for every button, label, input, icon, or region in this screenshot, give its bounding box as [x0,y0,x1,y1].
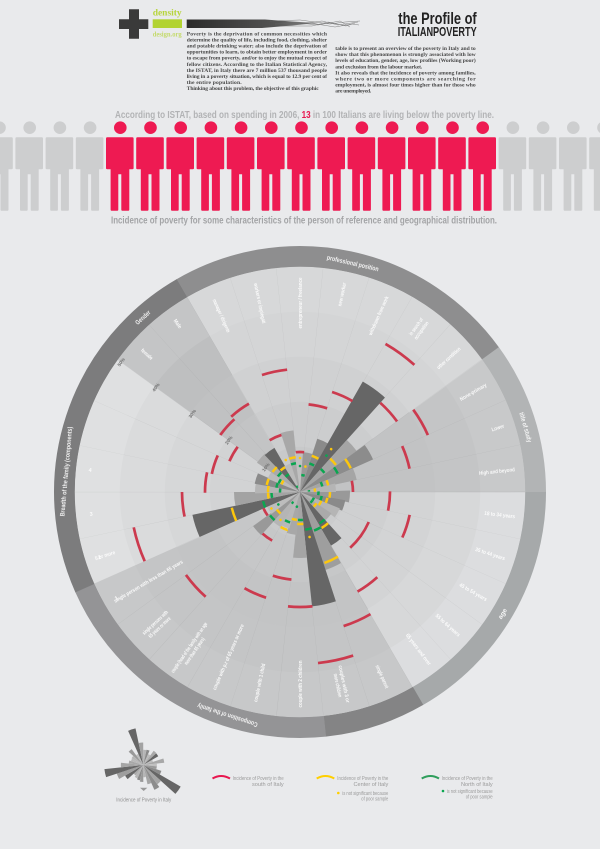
rim labels: Composition of the family [196,702,259,728]
wedge labels: gender: female [139,348,154,362]
rim labels: Breadth of the family (components) [59,426,74,517]
wedge labels: breadth of the family: 3 [89,512,93,518]
scale labels: 50% [116,357,126,367]
text block: intro column 1: determine the quality of life, including food, clothing, shelter [187,38,328,44]
wedge labels: composition of the family: single parent [374,664,389,690]
wedge labels: composition of the family: single person with less than 65 years [113,559,184,605]
wedge labels: gender [139,318,182,362]
title: ITALIANPOVERTY [398,24,477,39]
text block: intro column 1: and potable drinking water; also include the deprivation of [187,44,327,50]
logo: density design [119,8,182,39]
section: composition of the family rings [23,215,577,769]
wedge labels: age [404,511,515,667]
wedge labels: title of study: Lower [491,423,506,433]
text block: intro column 1: to escape from poverty, and/or to enjoy the mutual respect of [187,56,327,62]
wedge labels: professional position [211,278,462,371]
wedge labels: age: 65 years and over [404,633,432,667]
text block: intro column 2: table is to present an overview of the poverty in Italy and to [335,46,476,52]
rim labels: professional position [326,255,379,273]
wedge labels: age: 18 to 34 years [484,511,515,520]
legend: north of Italy [422,776,493,800]
wedge labels: age: 55 to 64 years [434,613,461,638]
wedge labels: professional position: new worker [337,282,348,307]
text block: intro column 2: employment, is almost four times higher than for those who [335,83,476,89]
text block: intro column 2 [335,46,477,95]
wedge labels: composition of the family: couple with 1 child [253,663,267,703]
wedge labels: breadth of the family: 4 [88,468,92,474]
wedge labels: composition of the family: couple with 2 children [298,660,304,708]
legend: south of Italy [212,776,284,788]
wedge dividers [188,380,412,604]
radial chart [0,163,600,821]
green dots: not significant [277,454,328,508]
section: gender rings [17,209,583,775]
wedge labels: composition of the family: single persons with [142,610,170,637]
wedge labels: breadth of the family: 1 [114,595,120,602]
section: age rings [98,290,502,694]
text block: intro column 1: fellow citizens. According to the Italian Statistical Agency, [187,62,328,68]
wedge labels: professional position: withdrawn from work [368,296,391,337]
wedge labels: composition of the family: couple (head of the family with an age [170,622,209,674]
wedge labels: title of study [459,383,515,477]
wedge labels: composition of the family: more than 65 years) [184,637,207,667]
legend: center of Italy: Center of Italy [353,782,388,788]
pictogram: grey people left [0,121,103,211]
scale labels: 40% [151,382,161,393]
text block: intro column 1: Thinking about this problem, the objective of this graphic [187,86,319,92]
legend: center of Italy [317,776,388,802]
wedge labels: composition of the family: 65 years or more [148,616,172,640]
text block: intro column 1: living in a poverty situation, which is equal to 12.9 per cent of [187,74,327,80]
wedge labels: composition of the family: couple with p.r of 65 years or more [212,624,246,691]
wedge labels: age: 45 to 54 years [458,582,488,603]
headline: 13 in 100: According to ISTAT, based on spending in 2006, 13 in 100 Italians are living below the poverty line. [115,109,494,121]
red arcs: south of Italy [66,258,534,726]
wedge labels: composition of the family: couples with 3 or [337,665,350,704]
text block: intro column 1: Poverty is the deprivation of common necessities which [187,32,328,38]
wedge labels: breadth of the family [88,468,120,602]
text block: intro column 2: are unemployed. [335,89,372,95]
green arcs: north of Italy [241,433,359,551]
mini chart: incidence of poverty in Italy [114,736,173,804]
text block: intro column 1: opportunities to learn, to obtain better employment in order [187,50,328,56]
wedge labels: breadth of the family: 2 [97,555,102,561]
scale labels [116,357,271,473]
wedge labels: title of study: None-primary [459,383,488,403]
rim labels: Gender [134,309,153,327]
text block: intro column 2: show that this phenomenon is strongly associated with low [335,52,477,58]
wedge labels: professional position: occupation [413,321,431,341]
section: professional position rings [23,215,577,769]
legend: north of Italy: Incidence of Poverty in the [442,776,493,782]
outer band: category sections [0,163,600,821]
text block: intro column 2: where two or more components are searching for [335,76,476,82]
section: breadth of the family rings [33,225,567,759]
scale labels: 30% [188,409,197,419]
legend: south of Italy: south of Italy [252,782,284,788]
yellow arcs: center of Italy [198,390,402,594]
wedge labels: professional position: workers or impiegati [252,282,266,324]
wedge labels: composition of the family [113,559,389,708]
wedge labels: professional position: other condition [436,347,462,371]
rim labels: age [497,607,509,621]
wedge labels: gender: Male [172,318,182,330]
text block: intro column 1: the entire population. [187,80,242,86]
text block: intro column 1: the ISTAT, in Italy there are 7 million 537 thousand people [187,68,328,74]
text block: intro column 1 [187,32,328,92]
text block: intro column 2: levels of education, gender, age, low profiles (Working poor) [335,57,476,64]
rim labels [59,255,533,728]
wedge labels: title of study: High and beyond [479,467,515,477]
wedge labels: professional position: entrepreneur / freelance [298,278,304,328]
pictogram: 13 red people [106,121,496,211]
yellow dots: not significant [270,447,333,539]
wedge labels: breadth of the family: 5 or more [94,550,116,562]
logo word: design: design.org [153,30,182,38]
title: the Profile of [398,9,477,28]
legend: north of Italy: of poor sample [466,794,493,800]
title [398,9,477,39]
national incidence bars [213,405,387,579]
rim labels: title of study [517,412,533,444]
wedge labels: professional position: in search of [408,317,425,337]
wedge labels: professional position: manager / dirigente [211,298,231,334]
subheading: Incidence of poverty for some characteristics of the person of reference and geographical distribution. [111,216,497,226]
mini chart caption: Incidence of Poverty in Italy [116,798,171,804]
legend: north of Italy: is not significant because [447,789,493,795]
legend: south of Italy: Incidence of Poverty in the [233,776,284,782]
logo word: density: density [153,8,182,18]
scale labels: 10% [261,462,271,473]
wedge labels: age: 35 to 44 years [474,547,506,562]
scale labels: 20% [224,435,234,445]
wedge labels: composition of the family: more children [332,673,342,698]
decorative fibre bar [187,20,360,28]
legend: north of Italy: North of Italy [461,782,493,788]
text block: intro column 2: It also reveals that the incidence of poverty among families, [335,70,476,76]
logo green bar [153,19,182,28]
legend: center of Italy: of poor sample [361,796,388,802]
text block: intro column 2: and exclusion from the labour market. [335,64,423,70]
legend: center of Italy: Incidence of Poverty in the [337,776,388,782]
pictogram: grey people right [499,121,600,211]
icon: plus sign [119,9,148,39]
legend: center of Italy: is not significant because [342,791,388,797]
section: title of study rings [17,209,583,775]
